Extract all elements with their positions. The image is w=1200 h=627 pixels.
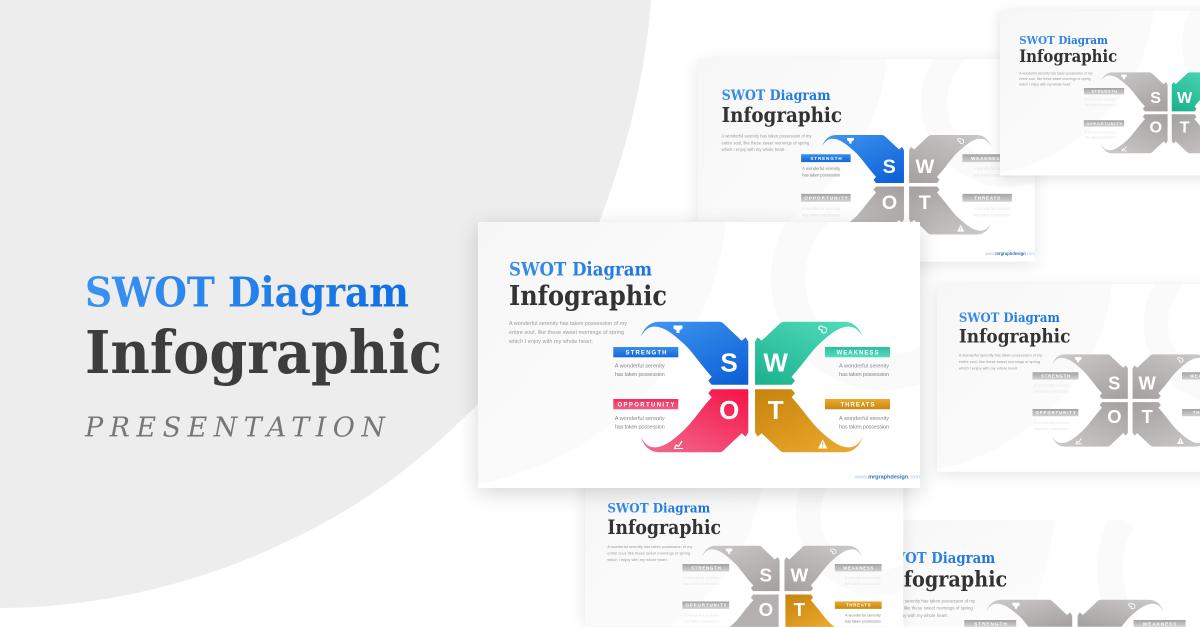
slide: bottom middle, threats highlighted: S bbox=[759, 565, 772, 586]
slide: top middle, strength highlighted: which I enjoy with my whole heart. bbox=[722, 147, 786, 152]
slide: top middle, strength highlighted: A wonderful serenity bbox=[973, 166, 1012, 171]
slide: right middle, all grey: W bbox=[1139, 373, 1157, 394]
slide: top middle, strength highlighted: Infographic bbox=[722, 103, 842, 127]
slide: top middle, strength highlighted: S bbox=[883, 156, 896, 178]
slide: top middle, strength highlighted: www.mrgraphdesign.com bbox=[985, 251, 1035, 256]
main slide title: SWOT Diagram bbox=[509, 260, 652, 281]
slide: right middle, all grey: T bbox=[1142, 406, 1154, 427]
main slide description: A wonderful serenity has taken possession of my bbox=[509, 321, 627, 327]
main heading: SWOT Diagram: SWOT Diagram bbox=[85, 268, 409, 316]
SWOT quadrant diagram: W bbox=[763, 348, 788, 378]
slide: top middle, strength highlighted: has taken possession bbox=[973, 172, 1012, 177]
slide: top right, weakness highlighted: has taken possession bbox=[1085, 103, 1116, 107]
main slide title bbox=[509, 260, 667, 312]
slide: bottom middle, threats highlighted: STRENGTH bbox=[691, 565, 721, 570]
slide: top middle, strength highlighted: has taken possession bbox=[802, 212, 841, 217]
subtitle: PRESENTATION: PRESENTATION bbox=[84, 412, 386, 444]
slide: bottom middle, threats highlighted: A wonderful serenity has taken possession of my bbox=[607, 544, 692, 549]
slide: bottom right, all grey: SWOT Diagram bbox=[881, 550, 996, 567]
grey background blob bbox=[0, 0, 651, 608]
slide: bottom middle, threats highlighted: THREATS bbox=[846, 603, 871, 608]
slide: top middle, strength highlighted: THREATS bbox=[974, 195, 1000, 200]
slide: right middle, all grey: S bbox=[1108, 373, 1120, 394]
slide: right middle, all grey: has taken possession bbox=[1034, 389, 1069, 394]
slide: right middle, all grey: A wonderful serenity bbox=[1034, 383, 1069, 388]
slide: top right, weakness highlighted: A wonderful serenity bbox=[1085, 98, 1116, 102]
slide: right middle, all grey: OPPORTUNITY bbox=[1035, 410, 1076, 415]
slide: bottom middle, threats highlighted: A wonderful serenity bbox=[683, 575, 719, 580]
slide: top right, weakness highlighted: S bbox=[1150, 89, 1161, 107]
strength label: STRENGTH bbox=[626, 350, 666, 356]
SWOT quadrant diagram: O bbox=[719, 395, 739, 425]
slide: top middle, strength highlighted: STRENGTH bbox=[810, 156, 842, 161]
slide: main full colour SWOT diagram bbox=[470, 218, 928, 502]
slide: top middle, strength highlighted: A wonderful serenity bbox=[973, 206, 1012, 211]
slide: right middle, all grey: SWOT Diagram bbox=[959, 311, 1060, 326]
weakness label: has taken possession bbox=[839, 372, 889, 378]
SWOT quadrant diagram bbox=[641, 322, 863, 452]
main heading: Infographic: Infographic bbox=[85, 318, 442, 387]
slide: top right, weakness highlighted: which I enjoy with my whole heart. bbox=[1019, 83, 1071, 87]
slide: bottom right, all grey: Infographic bbox=[881, 567, 1007, 592]
slide: right middle, all grey: A wonderful serenity bbox=[1034, 420, 1069, 425]
slide: top right, weakness highlighted: STRENGTH bbox=[1091, 90, 1117, 94]
slide: top middle, strength highlighted: A wonderful serenity bbox=[802, 166, 841, 171]
threats label: has taken possession bbox=[839, 424, 889, 430]
opportunity label: OPPORTUNITY bbox=[618, 402, 674, 408]
opportunity label bbox=[613, 399, 678, 430]
strength label: A wonderful serenity bbox=[615, 364, 665, 370]
strength label bbox=[613, 347, 678, 378]
slide: bottom middle, threats highlighted: A wonderful serenity bbox=[845, 575, 881, 580]
slide: top middle, strength highlighted: W bbox=[916, 156, 935, 178]
slide: top right, weakness highlighted: O bbox=[1150, 119, 1162, 137]
main slide description bbox=[508, 321, 627, 345]
slide: top right, weakness highlighted: T bbox=[1180, 119, 1190, 137]
slide: top middle, strength highlighted: has taken possession bbox=[973, 212, 1012, 217]
website url: www.mrgraphdesign.com bbox=[854, 474, 920, 480]
weakness label bbox=[825, 347, 890, 378]
main slide description: which I enjoy with my whole heart. bbox=[508, 339, 593, 345]
slide: top middle, strength highlighted: A wonderful serenity has taken possession of my bbox=[722, 133, 812, 138]
slide: top right, weakness highlighted: A wonderful serenity bbox=[1085, 130, 1116, 134]
slide: bottom middle, threats highlighted: SWOT Diagram bbox=[607, 502, 710, 517]
threats label: A wonderful serenity bbox=[839, 416, 889, 422]
slide: bottom right, all grey: which I enjoy with my whole heart. bbox=[881, 613, 948, 618]
opportunity label: has taken possession bbox=[615, 424, 665, 430]
slide: right middle, all grey: has taken possession bbox=[1034, 426, 1069, 431]
weakness label: WEAKNESS bbox=[836, 350, 878, 356]
slide: top middle, strength highlighted bbox=[694, 58, 1038, 268]
slide: top right, weakness highlighted: A wonderful serenity has taken possession of my bbox=[1019, 71, 1093, 75]
main slide description: entire soul, like these sweet mornings of spring bbox=[509, 330, 624, 336]
slide: top right, weakness highlighted bbox=[1000, 0, 1200, 178]
slide: top middle, strength highlighted: A wonderful serenity bbox=[802, 206, 841, 211]
slide: bottom middle, threats highlighted: OPPORTUNITY bbox=[685, 603, 727, 608]
slide: top right, weakness highlighted: OPPORTUNITY bbox=[1086, 122, 1122, 126]
slide: top middle, strength highlighted: entire soul, like these sweet mornings of spring bbox=[722, 140, 810, 145]
slide: top right, weakness highlighted: SWOT Diagram bbox=[1019, 33, 1108, 47]
slide: bottom middle, threats highlighted: has taken possession bbox=[845, 581, 881, 586]
slide: top right, weakness highlighted: has taken possession bbox=[1085, 136, 1116, 140]
slide: top middle, strength highlighted: OPPORTUNITY bbox=[804, 195, 848, 200]
slide: right middle, all grey: STRENGTH bbox=[1041, 373, 1070, 378]
slide: bottom middle, threats highlighted: O bbox=[759, 599, 773, 620]
slide: right middle, all grey: O bbox=[1107, 406, 1122, 427]
slide: bottom middle, threats highlighted: which I enjoy with my whole heart. bbox=[607, 557, 668, 562]
slide: right middle, all grey: Infographic bbox=[959, 326, 1070, 348]
slide: bottom middle, threats highlighted bbox=[582, 488, 906, 627]
slide: top middle, strength highlighted: WEAKNESS bbox=[971, 156, 1003, 161]
slide: bottom right, all grey: entire soul, like these sweet mornings of spring bbox=[881, 606, 973, 611]
slide: right middle, all grey: entire soul, like these sweet mornings of spring bbox=[959, 360, 1040, 364]
strength label: has taken possession bbox=[615, 372, 665, 378]
slide: bottom middle, threats highlighted: T bbox=[794, 599, 806, 620]
slide: bottom middle, threats highlighted: entire soul, like these sweet mornings of spring bbox=[607, 551, 690, 556]
slide: bottom middle, threats highlighted: A wonderful serenity bbox=[683, 613, 719, 618]
slide: right middle, all grey: which I enjoy with my whole heart. bbox=[959, 366, 1018, 370]
slide: top middle, strength highlighted: O bbox=[882, 192, 897, 214]
slide: top middle, strength highlighted: SWOT Diagram bbox=[722, 88, 831, 104]
slide: top right, weakness highlighted: W bbox=[1177, 89, 1193, 107]
slide: bottom middle, threats highlighted: W bbox=[791, 565, 809, 586]
slide: bottom middle, threats highlighted: has taken possession bbox=[683, 619, 719, 624]
slide: right middle, all grey: A wonderful serenity has taken possession of my bbox=[959, 354, 1042, 358]
slide: bottom middle, threats highlighted: A wonderful serenity bbox=[845, 613, 881, 618]
threats label bbox=[825, 399, 890, 430]
SWOT quadrant diagram: T bbox=[768, 395, 784, 425]
slide: bottom middle, threats highlighted: WEAKNESS bbox=[843, 565, 873, 570]
main slide title: Infographic bbox=[509, 281, 667, 312]
slide: bottom middle, threats highlighted: has taken possession bbox=[683, 581, 719, 586]
SWOT quadrant diagram: S bbox=[720, 348, 738, 378]
slide: top middle, strength highlighted: T bbox=[919, 192, 931, 214]
slide: top right, weakness highlighted: entire soul, like these sweet mornings of spring bbox=[1019, 77, 1091, 81]
slide: bottom right, all grey bbox=[903, 552, 1186, 627]
slide: bottom middle, threats highlighted: has taken possession bbox=[845, 619, 881, 624]
threats label: THREATS bbox=[840, 402, 874, 408]
slide: bottom middle, threats highlighted: Infographic bbox=[607, 516, 721, 539]
slide: top right, weakness highlighted: Infographic bbox=[1019, 46, 1117, 66]
opportunity label: A wonderful serenity bbox=[615, 416, 665, 422]
slide: top middle, strength highlighted: has taken possession bbox=[802, 172, 841, 177]
weakness label: A wonderful serenity bbox=[839, 364, 889, 370]
slide: bottom right, all grey: A wonderful serenity has taken possession of my bbox=[881, 598, 976, 603]
slide: right middle, all grey bbox=[937, 256, 1200, 475]
